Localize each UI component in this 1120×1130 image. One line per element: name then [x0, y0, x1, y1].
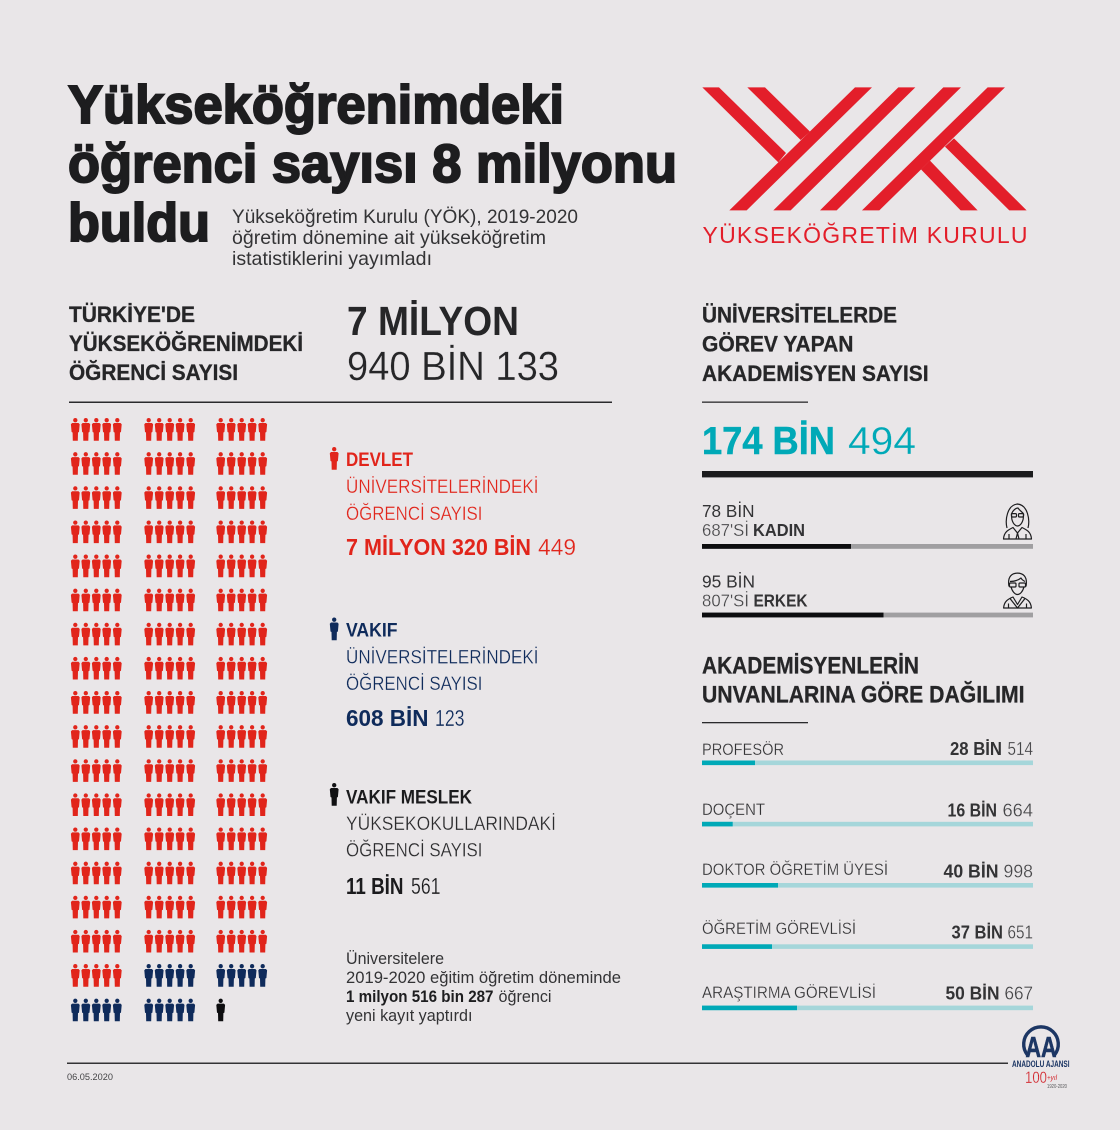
total academics number: 494: [848, 420, 916, 463]
heading: student count: ÖĞRENCİ SAYISI: [69, 360, 238, 385]
icon: red person: [330, 447, 339, 470]
row: lecturer: 37 BİN: [952, 922, 1003, 942]
icon: man: [1004, 573, 1031, 608]
row: professor: PROFESÖR: [702, 740, 784, 759]
value: men: ERKEK: [754, 590, 808, 610]
heading: academics: AKADEMİSYEN SAYISI: [702, 361, 928, 386]
label: VAKIF: VAKIF: [346, 620, 398, 642]
bar: women: [702, 544, 1033, 549]
value: men: [702, 572, 808, 610]
label: DEVLET: DEVLET: [346, 450, 413, 471]
logo mark: [702, 87, 1027, 210]
row: associate professor: [702, 800, 1033, 826]
subtitle text: [232, 206, 578, 270]
title: Yükseköğrenimdeki: [68, 75, 564, 135]
title: buldu: [68, 193, 210, 253]
note: new enrolments: 1 milyon 516 bin 287: [346, 988, 494, 1006]
row: associate professor: 664: [1002, 800, 1033, 820]
total students number: [347, 298, 559, 389]
total academics number: [702, 420, 916, 463]
heading: academic titles: AKADEMİSYENLERİN: [702, 652, 919, 680]
description: foundation: ÖĞRENCİ SAYISI: [346, 672, 482, 695]
row: lecturer: [702, 919, 1033, 949]
logo wordmark: YÜKSEKÖĞRETİM KURULU: [702, 222, 1028, 248]
row: research assistant: ARAŞTIRMA GÖREVLİSİ: [702, 983, 876, 1002]
subtitle text: Yükseköğretim Kurulu (YÖK), 2019-2020: [232, 206, 578, 228]
icon: black person: [330, 783, 339, 806]
heading: academic titles: UNVANLARINA GÖRE DAĞILIMI: [702, 680, 1024, 708]
row: associate professor: 16 BİN: [948, 800, 997, 820]
subtitle text: istatistiklerini yayımladı: [232, 248, 432, 270]
heading: academics: ÜNİVERSİTELERDE: [702, 302, 897, 328]
description: foundation: ÜNİVERSİTELERİNDEKİ: [346, 646, 538, 668]
row: assistant professor: DOKTOR ÖĞRETİM ÜYESİ: [702, 860, 888, 879]
logo arc: [1024, 1027, 1058, 1055]
note: new enrolments: 2019-2020 eğitim öğretim döneminde: [346, 969, 621, 987]
years range: 1920-2020: [1047, 1084, 1067, 1090]
logo: YÖK: [702, 87, 1028, 248]
value: women: 687'Sİ: [702, 520, 749, 540]
agency name: ANADOLU AJANSI: [1012, 1059, 1070, 1069]
row: assistant professor: 40 BİN: [944, 862, 998, 882]
total students number: 940 BİN 133: [347, 343, 559, 389]
heading: academics: [702, 302, 928, 386]
value: foundation students: 123: [435, 705, 464, 731]
value: state students: 7 MİLYON 320 BİN: [346, 534, 531, 560]
value: state students: 449: [538, 534, 576, 560]
100 years mark: 100: [1025, 1068, 1047, 1087]
description: state: ÜNİVERSİTELERİNDEKİ: [346, 475, 538, 498]
row: research assistant: 667: [1004, 984, 1033, 1004]
icon: woman: [1004, 504, 1032, 539]
row: lecturer: 651: [1008, 922, 1033, 942]
heading: student count: [69, 302, 303, 385]
pictogram: students by institution: [71, 418, 267, 1021]
note: new enrolments: [346, 950, 621, 1025]
row: associate professor: DOÇENT: [702, 800, 765, 819]
description: vocational: [346, 812, 556, 862]
label: VAKIF MESLEK: VAKIF MESLEK: [346, 788, 472, 808]
logo: Anadolu Ajansi: [1012, 1027, 1070, 1090]
heading: student count: TÜRKİYE'DE: [69, 302, 195, 327]
note: new enrolments: Üniversitelere: [346, 950, 444, 968]
description: state: ÖĞRENCİ SAYISI: [346, 502, 482, 525]
heading: academics: GÖREV YAPAN: [702, 332, 854, 356]
total students number: 7 MİLYON: [347, 298, 519, 344]
title: [68, 75, 677, 253]
row: assistant professor: 998: [1004, 862, 1033, 882]
description: foundation: [346, 646, 538, 695]
value: foundation students: 608 BİN: [346, 705, 428, 731]
total bar: [702, 471, 1033, 477]
value: women: [702, 501, 805, 540]
subtitle text: öğretim dönemine ait yükseköğretim: [232, 227, 546, 249]
row: assistant professor: [702, 860, 1033, 888]
value: women: 78 BİN: [702, 501, 754, 521]
description: vocational: ÖĞRENCİ SAYISI: [346, 838, 482, 862]
row: professor: 28 BİN: [950, 739, 1002, 759]
row: professor: 514: [1008, 739, 1033, 759]
value: men: 95 BİN: [702, 572, 755, 592]
panel: women academics: [702, 501, 1033, 549]
value: women: KADIN: [753, 520, 805, 540]
value: vocational students: 11 BİN: [346, 873, 404, 899]
row: professor: [702, 739, 1033, 765]
heading: academic titles: [702, 652, 1024, 708]
years word: +yıl: [1047, 1075, 1057, 1082]
panel: state universities: [330, 447, 576, 560]
row: research assistant: [702, 983, 1033, 1010]
note: new enrolments: yeni kayıt yaptırdı: [346, 1007, 472, 1025]
date: 06.05.2020: [67, 1072, 113, 1083]
total academics number: 174 BİN: [702, 420, 835, 463]
row: research assistant: 50 BİN: [946, 984, 1000, 1004]
row: lecturer: ÖĞRETİM GÖREVLİSİ: [702, 919, 856, 938]
note: new enrolments: öğrenci: [498, 988, 552, 1006]
title: öğrenci sayısı 8 milyonu: [68, 134, 677, 194]
panel: foundation vocational schools: [330, 783, 556, 899]
logo letters: AA: [1026, 1032, 1057, 1064]
panel: foundation universities: [330, 618, 538, 731]
panel: men academics: [702, 572, 1033, 617]
description: state: [346, 475, 538, 525]
heading: student count: YÜKSEKÖĞRENİMDEKİ: [69, 331, 303, 356]
icon: navy person: [330, 618, 339, 640]
bar: men: [702, 613, 1033, 617]
value: vocational students: 561: [411, 873, 440, 899]
description: vocational: YÜKSEKOKULLARINDAKİ: [346, 812, 556, 835]
value: men: 807'Sİ: [702, 590, 749, 610]
